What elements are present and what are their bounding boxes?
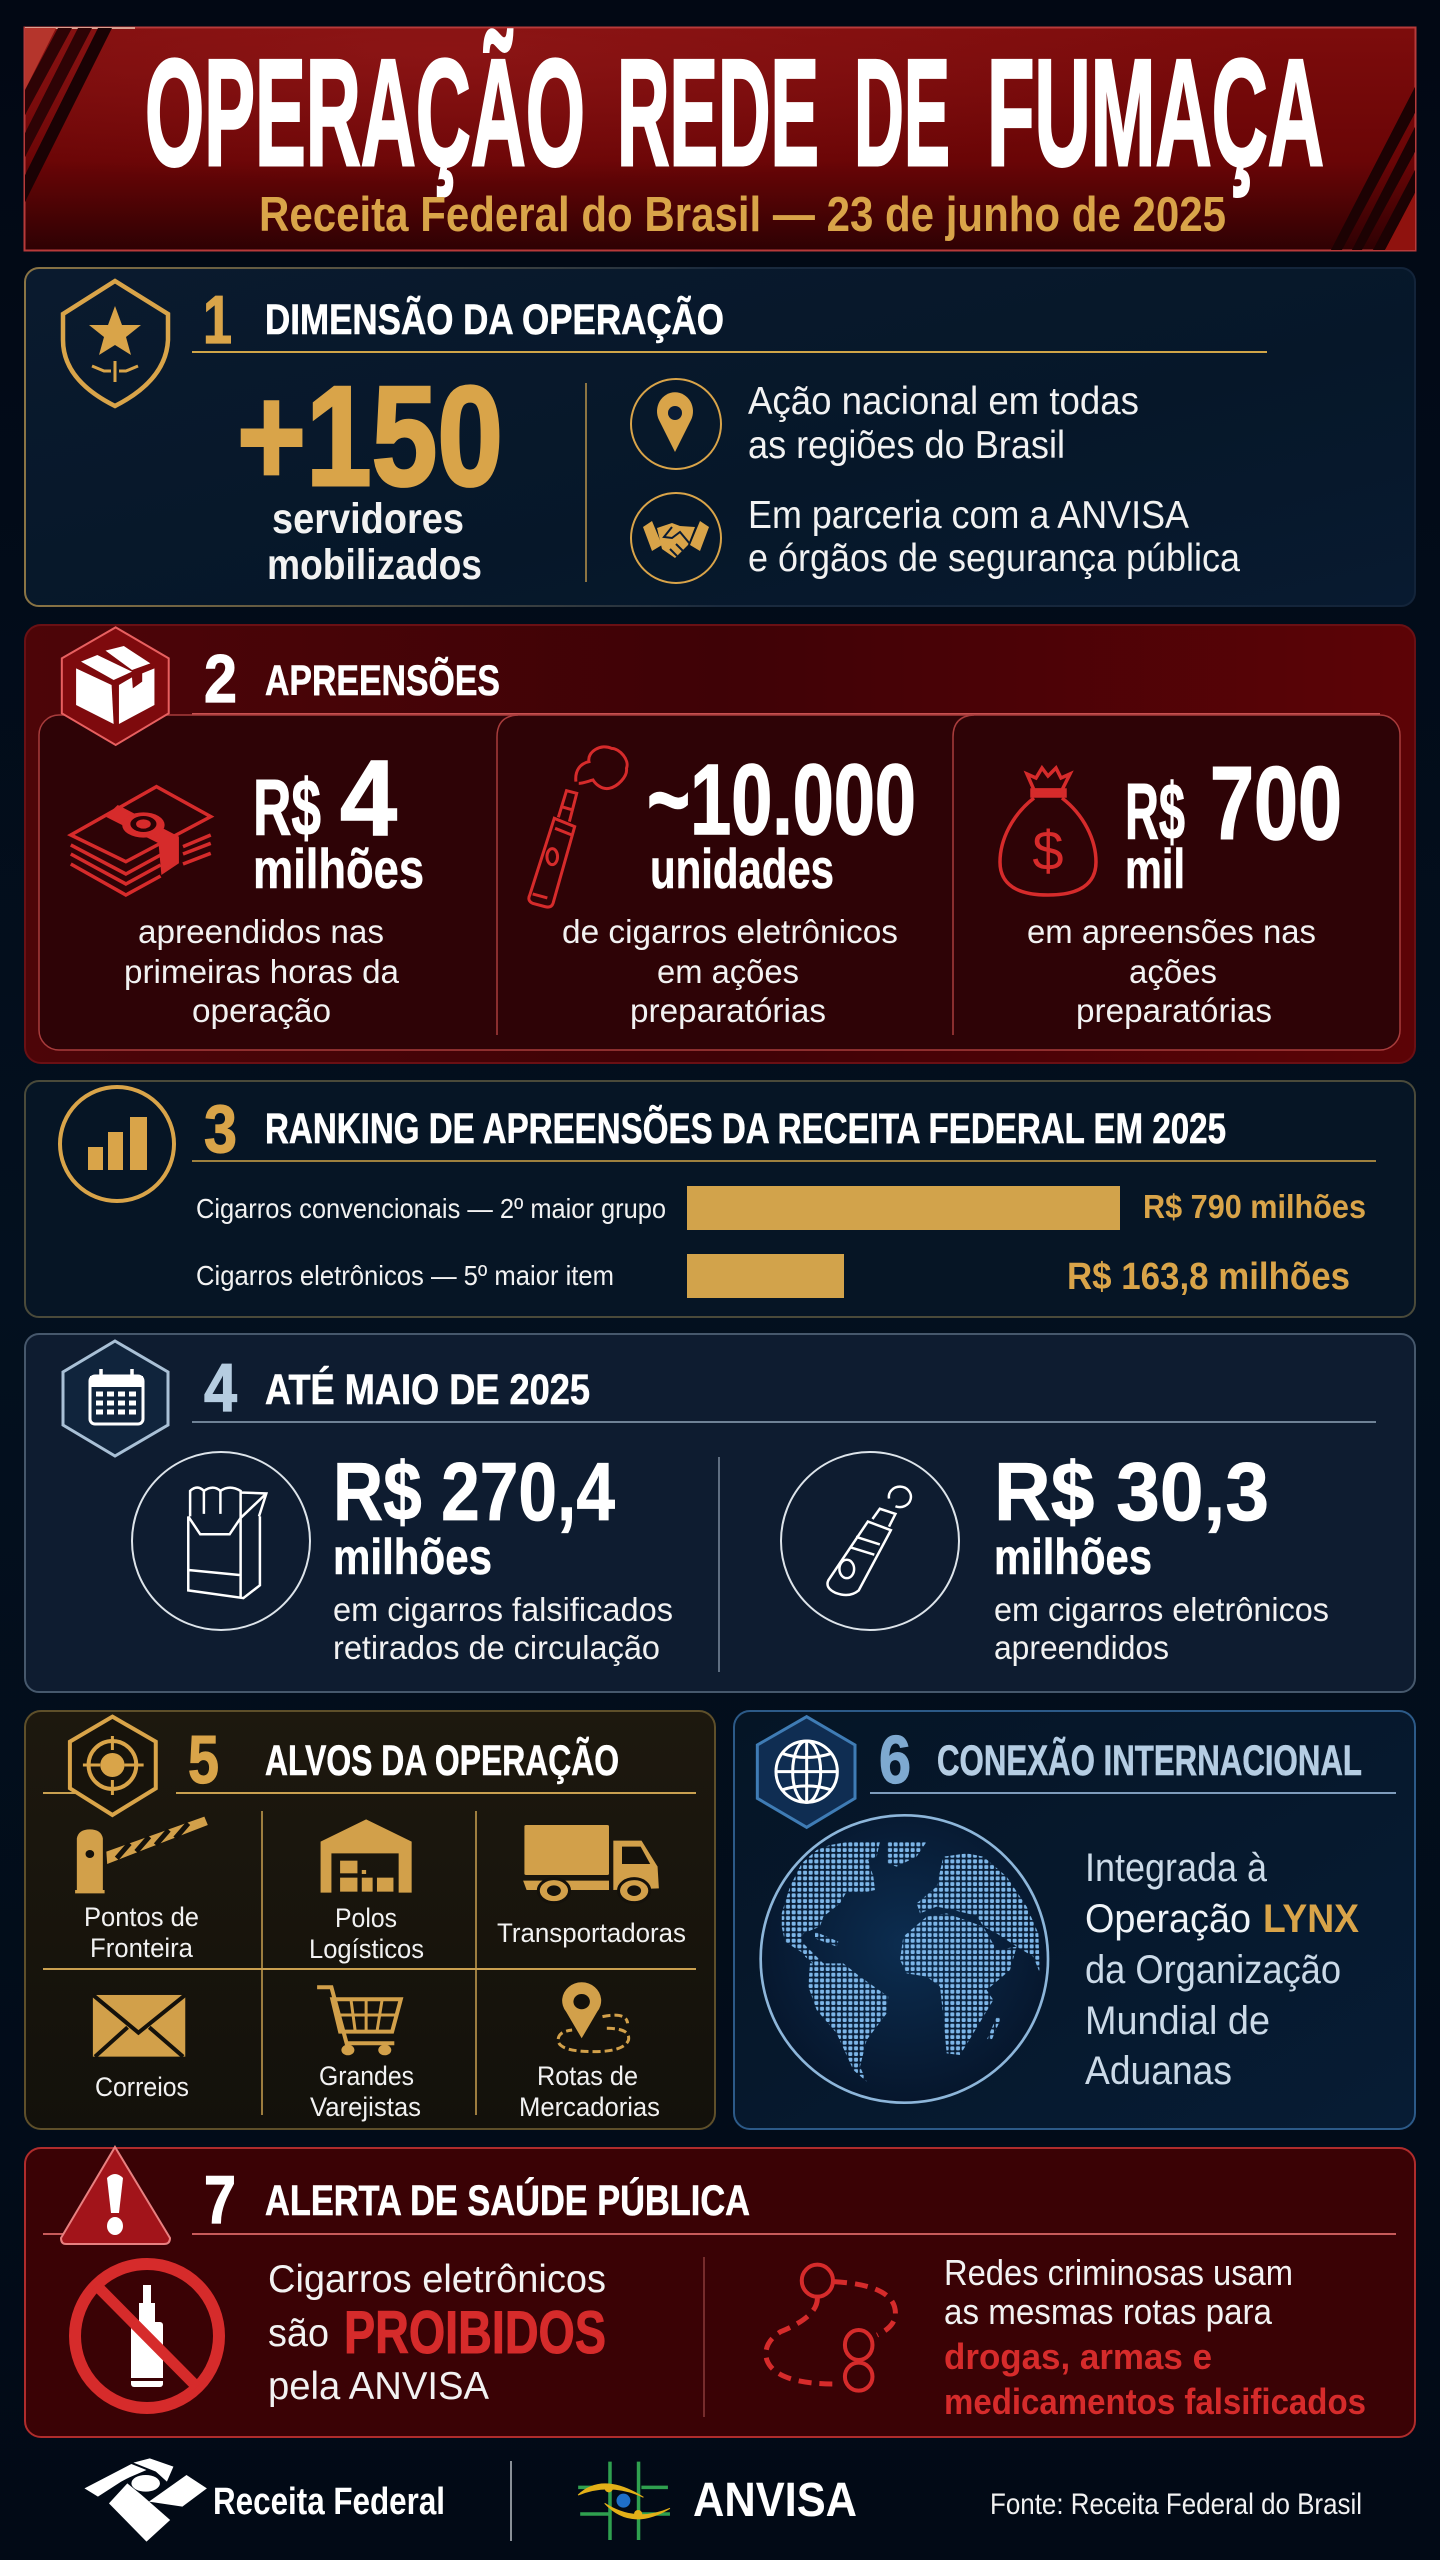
stat: R$ 4 milhões xyxy=(253,737,424,900)
header banner xyxy=(24,28,1416,250)
icon: stack of money xyxy=(71,787,211,895)
stat: 10.000 unidades xyxy=(647,744,916,900)
label: polos logísticos xyxy=(309,1903,424,1964)
icon: cigarette pack xyxy=(132,1452,310,1630)
stat: +150 servidores: mobilizados xyxy=(267,541,482,589)
text: operação lynx xyxy=(1085,1846,1359,2093)
bar row: cigarros convencionais: R$ 790 milhões xyxy=(1143,1188,1366,1225)
panel 6: conexão internacional xyxy=(734,1711,1415,2129)
stat: 30,3 xyxy=(994,1445,1329,1666)
stat: 30,3: milhões xyxy=(994,1529,1152,1585)
text: em apreensões xyxy=(1027,913,1316,1029)
panel 3: ranking xyxy=(25,1081,1415,1317)
text: operação lynx: da Organização xyxy=(1085,1948,1341,1992)
stat: 30,3: apreendidos xyxy=(994,1629,1169,1666)
heading: APREENSÕES xyxy=(265,656,500,705)
text: cigarros eletrônicos xyxy=(562,913,898,1029)
bar row: cigarros eletrônicos: Cigarros eletrônicos — 5º maior item xyxy=(196,1260,614,1291)
stat: 10.000 unidades: ~10.000 xyxy=(647,744,916,856)
icon: route pin xyxy=(558,1982,629,2052)
source credit: Fonte: Receita Federal do Brasil xyxy=(990,2488,1362,2521)
stat: 270,4: retirados de circulação xyxy=(333,1629,660,1666)
stat: R$ 4 milhões: milhões xyxy=(253,837,424,900)
text: parceria: e órgãos de segurança pública xyxy=(748,537,1240,580)
label: grandes varejistas: Varejistas xyxy=(310,2092,421,2122)
section number 5: 5 xyxy=(188,1722,219,1798)
stat: +150 servidores xyxy=(237,357,503,589)
label: rotas de mercadorias: Mercadorias xyxy=(519,2092,660,2122)
icon: money bag xyxy=(1000,768,1096,895)
icon: warehouse xyxy=(321,1819,412,1893)
logo: Receita Federal: Receita Federal xyxy=(213,2481,445,2523)
logo: ANVISA xyxy=(578,2462,857,2540)
panel 1: dimensão da operação xyxy=(25,268,1415,606)
section number 4: 4 xyxy=(204,1350,237,1426)
text: operação lynx: Aduanas xyxy=(1085,2049,1232,2093)
text: em apreensões: preparatórias xyxy=(1076,992,1272,1029)
stat: R$ 700 mil: mil xyxy=(1125,837,1185,900)
globe with dotted continents xyxy=(761,1815,1048,2103)
stat: 270,4: R$ 270,4 xyxy=(333,1445,615,1538)
footer xyxy=(84,2458,1362,2542)
icon: calendar xyxy=(63,1341,168,1456)
text: redes criminosas xyxy=(944,2252,1366,2422)
text: cigarros eletrônicos: de cigarros eletrônicos xyxy=(562,913,898,950)
stat: 270,4 xyxy=(333,1445,673,1666)
icon: bar chart in circle xyxy=(60,1087,174,1201)
text: apreendidos xyxy=(124,913,400,1029)
bar row: cigarros convencionais xyxy=(196,1186,1366,1230)
icon: border barrier xyxy=(75,1817,208,1893)
text: ação nacional xyxy=(748,380,1139,467)
text: cigarros eletrônicos: preparatórias xyxy=(630,992,826,1029)
label: pontos de fronteira: Pontos de xyxy=(84,1902,199,1932)
text: proibidos xyxy=(268,2258,606,2408)
icon: prohibited vape xyxy=(75,2264,219,2408)
text: proibidos: PROIBIDOS xyxy=(344,2299,606,2366)
icon: shopping cart xyxy=(317,1987,401,2055)
text: em apreensões: ações xyxy=(1129,953,1217,990)
section number 3: 3 xyxy=(204,1091,237,1167)
section number 7: 7 xyxy=(204,2162,236,2238)
stat: +150 servidores: +150 xyxy=(237,357,503,516)
stat: +150 servidores: servidores xyxy=(272,495,464,543)
text: cigarros eletrônicos: em ações xyxy=(657,953,799,990)
stat: R$ 700 mil: R$ xyxy=(1125,767,1185,856)
icon: warning triangle xyxy=(61,2147,170,2244)
text: proibidos: são xyxy=(268,2312,329,2355)
icon: shield with star xyxy=(63,281,168,406)
label: grandes varejistas: Grandes xyxy=(319,2061,414,2091)
stat: 30,3: R$ 30,3 xyxy=(994,1445,1269,1538)
section number 1: 1 xyxy=(203,282,232,358)
text: operação lynx: Integrada à xyxy=(1085,1846,1268,1890)
text: redes criminosas: drogas, armas e xyxy=(944,2336,1212,2377)
label: pontos de fronteira xyxy=(84,1902,199,1963)
panel 5: alvos da operação xyxy=(25,1711,715,2129)
label: grandes varejistas xyxy=(310,2061,421,2122)
heading: ALVOS DA OPERAÇÃO xyxy=(265,1737,619,1785)
label: rotas de mercadorias xyxy=(519,2061,660,2122)
icon: vape with smoke xyxy=(529,747,627,907)
subtitle: Receita Federal do Brasil — 23 de junho de 2025 xyxy=(259,188,1226,242)
panel 2: apreensões xyxy=(25,625,1415,1063)
text: apreendidos: primeiras horas da xyxy=(124,953,400,990)
label: correios: Correios xyxy=(95,2072,189,2102)
label: transportadoras: Transportadoras xyxy=(497,1918,686,1948)
text: em apreensões: em apreensões nas xyxy=(1027,913,1316,950)
icon: package xyxy=(62,627,169,745)
text: redes criminosas: as mesmas rotas para xyxy=(944,2291,1273,2332)
stat: R$ 4 milhões: 4 xyxy=(340,737,397,858)
stat: R$ 700 mil: 700 xyxy=(1210,746,1342,862)
section number 2: 2 xyxy=(204,641,237,717)
text: redes criminosas: Redes criminosas usam xyxy=(944,2252,1293,2293)
text: apreendidos: apreendidos nas xyxy=(138,913,384,950)
icon: truck xyxy=(523,1825,659,1903)
stat: 270,4: em cigarros falsificados xyxy=(333,1591,673,1628)
text: operação lynx: Operação xyxy=(1085,1897,1251,1941)
text: apreendidos: operação xyxy=(192,992,331,1029)
icon: vape device xyxy=(781,1452,959,1630)
label: rotas de mercadorias: Rotas de xyxy=(537,2061,638,2091)
label: pontos de fronteira: Fronteira xyxy=(90,1933,194,1963)
stat: 30,3: em cigarros eletrônicos xyxy=(994,1591,1329,1628)
icon: money bag: $ xyxy=(1032,819,1064,882)
label: polos logísticos: Logísticos xyxy=(309,1934,424,1964)
bar row: cigarros eletrônicos xyxy=(196,1254,1350,1298)
icon: globe in hexagon xyxy=(757,1717,855,1827)
stat: 270,4: milhões xyxy=(333,1529,492,1585)
panel 4: até maio de 2025 xyxy=(25,1334,1415,1692)
stat: R$ 4 milhões: R$ xyxy=(253,763,321,852)
text: parceria: Em parceria com a ANVISA xyxy=(748,494,1189,537)
section number 6: 6 xyxy=(879,1722,911,1798)
label: polos logísticos: Polos xyxy=(335,1903,397,1933)
title: OPERAÇÃO xyxy=(145,28,585,198)
text: parceria xyxy=(748,494,1240,580)
heading: DIMENSÃO DA OPERAÇÃO xyxy=(265,296,724,344)
text: proibidos: pela ANVISA xyxy=(268,2365,489,2408)
panel 7: alerta de saúde pública xyxy=(25,2147,1415,2437)
stat: 10.000 unidades: unidades xyxy=(650,837,834,900)
text: operação lynx: LYNX xyxy=(1263,1897,1359,1941)
logo: ANVISA: ANVISA xyxy=(693,2474,857,2527)
text: operação lynx: Mundial de xyxy=(1085,1999,1270,2043)
title: REDE xyxy=(617,28,819,198)
bar row: cigarros eletrônicos: R$ 163,8 milhões xyxy=(1067,1256,1350,1298)
icon: target xyxy=(70,1717,156,1815)
stat: R$ 700 mil xyxy=(1125,746,1342,900)
text: redes criminosas: medicamentos falsificados xyxy=(944,2381,1366,2422)
text: ação nacional: Ação nacional em todas xyxy=(748,380,1139,423)
logo: Receita Federal xyxy=(84,2458,445,2542)
bar row: cigarros convencionais: Cigarros convencionais — 2º maior grupo xyxy=(196,1193,666,1224)
icon: envelope xyxy=(93,1995,185,2057)
heading: ALERTA DE SAÚDE PÚBLICA xyxy=(265,2176,750,2225)
icon: location pin xyxy=(631,379,721,469)
icon: dashed route xyxy=(766,2265,895,2391)
text: proibidos: Cigarros eletrônicos xyxy=(268,2258,606,2301)
title: DE xyxy=(854,28,950,198)
text: ação nacional: as regiões do Brasil xyxy=(748,424,1065,467)
icon: handshake xyxy=(631,493,721,583)
heading: ATÉ MAIO DE 2025 xyxy=(265,1366,590,1414)
